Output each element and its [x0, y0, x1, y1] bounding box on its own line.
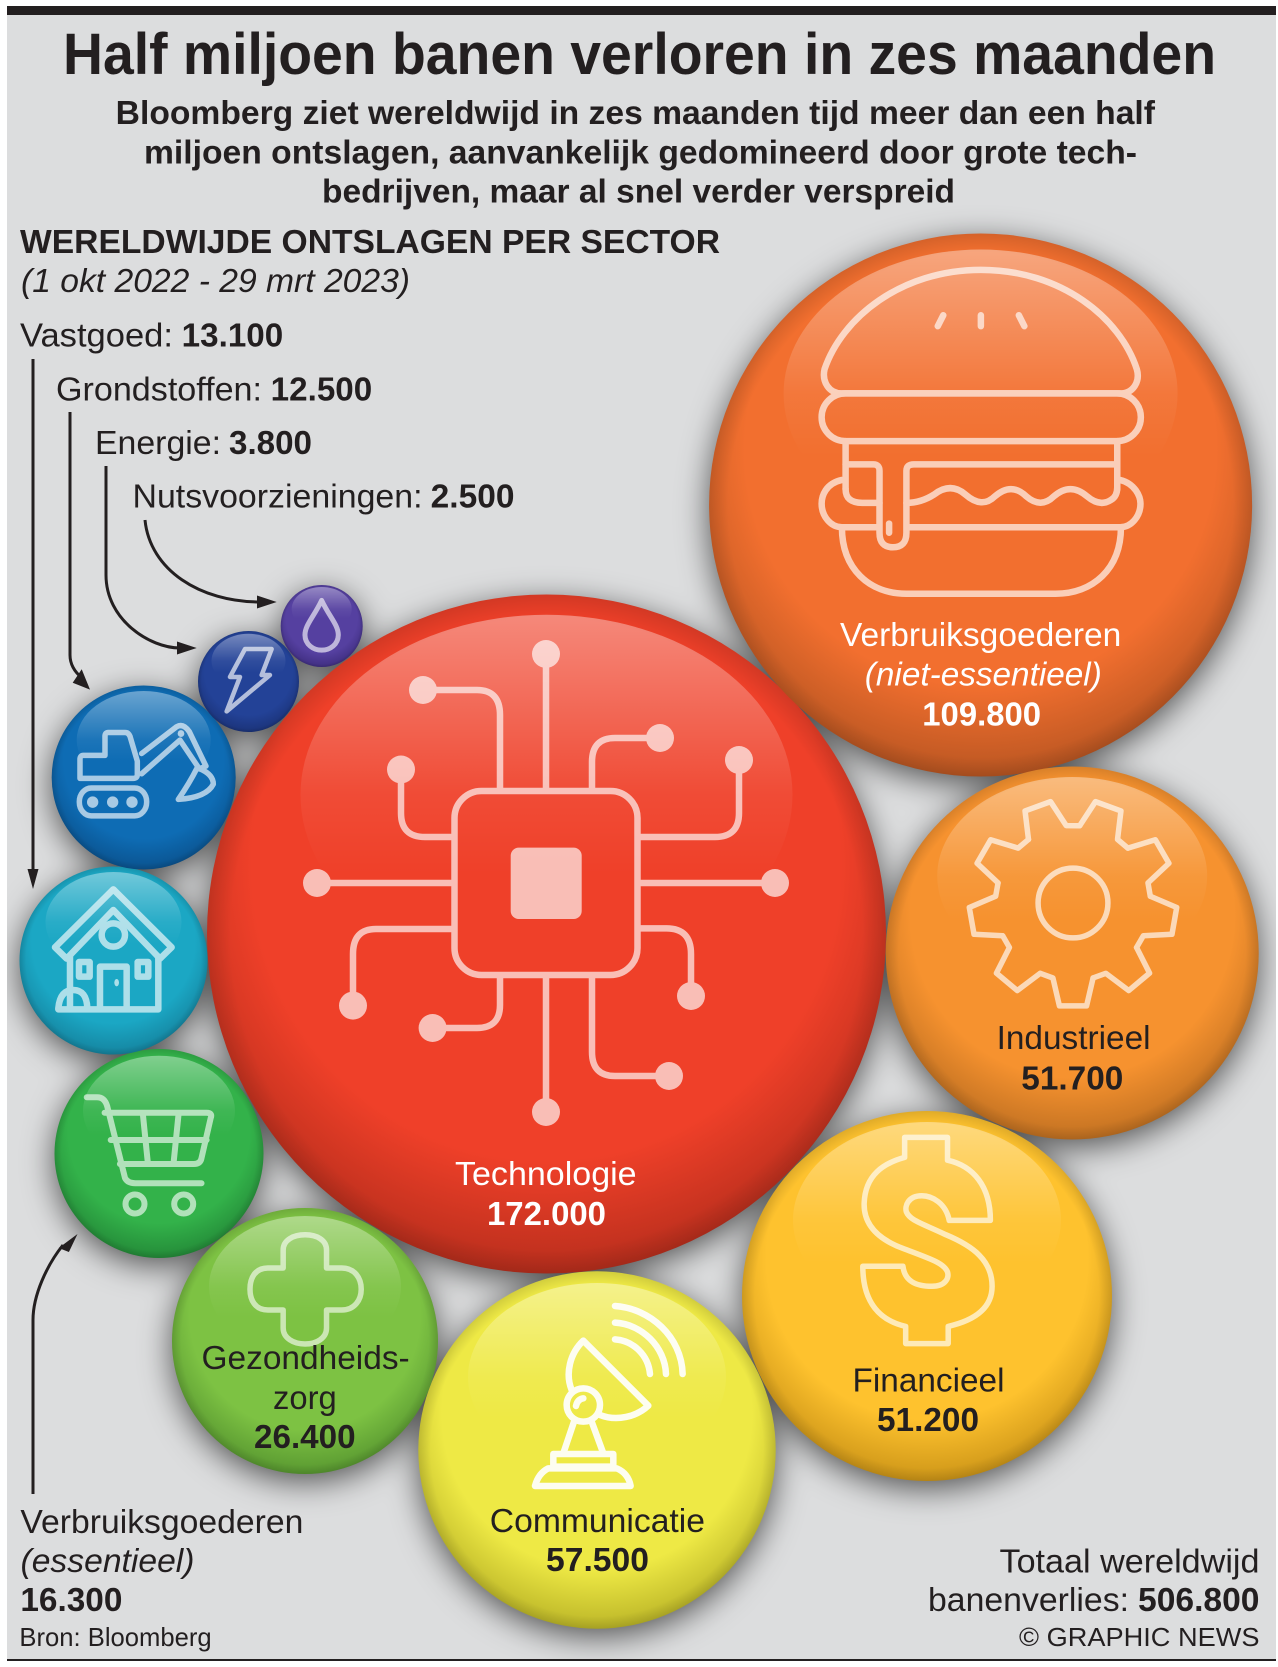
label: Nutsvoorzieningen: 2.500 [431, 477, 514, 514]
bubble: Financieel [742, 1111, 1112, 1481]
arrow: Nutsvoorzieningen [145, 520, 277, 608]
arrow: Verbruiksgoederen essentieel [33, 1234, 78, 1494]
label: Verbruiksgoederen [840, 616, 1121, 732]
icon: gear [966, 795, 1179, 1006]
section heading: WERELDWIJDE ONTSLAGEN PER SECTOR [20, 223, 720, 260]
label: Energie: Energie: [95, 424, 221, 461]
label: Industrieel: Industrieel [997, 1019, 1151, 1056]
label: Grondstoffen: 12.500 [271, 371, 372, 408]
bubble: Energie [198, 631, 299, 732]
label: Financieel: 51.200 [877, 1401, 979, 1438]
label: Gezondheidszorg [202, 1339, 410, 1455]
total callout: 506.800 [1138, 1581, 1260, 1618]
icon: lightning bolt [227, 649, 272, 711]
bubble: Verbruiksgoederen niet-essentieel [709, 234, 1252, 776]
icon: microchip [303, 640, 789, 1126]
label: Verbruiksgoederen essentieel: (essentieel) [20, 1542, 194, 1579]
total callout: Totaal wereldwijd [1000, 1543, 1260, 1580]
label: Nutsvoorzieningen: Nutsvoorzieningen: [132, 477, 422, 514]
label: Verbruiksgoederen essentieel: Verbruiksgoederen [20, 1503, 303, 1540]
bubble: Vastgoed [20, 866, 208, 1054]
arrow: Vastgoed [28, 359, 38, 889]
label: Energie [95, 424, 312, 461]
icon: house [55, 889, 172, 1009]
icon: medical cross [250, 1235, 361, 1344]
total callout: banenverlies: [928, 1581, 1129, 1618]
label: Verbruiksgoederen: 109.800 [922, 696, 1041, 732]
label: Gezondheidszorg: Gezondheids- [202, 1339, 410, 1376]
bubble: Communicatie [418, 1271, 776, 1629]
total callout [928, 1543, 1260, 1618]
label: Grondstoffen [56, 371, 372, 408]
bubble: Grondstoffen [52, 686, 236, 870]
label: Gezondheidszorg: zorg [273, 1379, 337, 1416]
label: Energie: 3.800 [229, 424, 312, 461]
date range: (1 okt 2022 - 29 mrt 2023) [21, 262, 410, 299]
bottom rule [7, 1659, 1276, 1661]
label: Technologie: Technologie [455, 1155, 637, 1192]
arrow: Grondstoffen [70, 412, 90, 690]
source: Bron: Bloomberg [19, 1622, 212, 1652]
label: Verbruiksgoederen: Verbruiksgoederen [840, 616, 1121, 653]
title: Half miljoen banen verloren in zes maanden [63, 22, 1216, 87]
label: Communicatie: Communicatie [490, 1502, 705, 1539]
subtitle [116, 94, 1156, 210]
credit: © GRAPHIC NEWS [1019, 1622, 1260, 1652]
label: Communicatie [490, 1502, 705, 1578]
bubble: Industrieel [886, 766, 1259, 1140]
label: Gezondheidszorg: 26.400 [254, 1418, 356, 1455]
icon: water drop [305, 600, 338, 650]
label: Industrieel: 51.700 [1021, 1060, 1123, 1097]
label: Verbruiksgoederen: (niet-essentieel) [865, 656, 1102, 692]
subtitle: Bloomberg ziet wereldwijd in zes maanden tijd meer dan een half [116, 94, 1156, 131]
icon: excavator [79, 726, 213, 816]
icon: shopping cart [87, 1097, 211, 1214]
label: Vastgoed: Vastgoed: [20, 317, 173, 354]
arrow: Energie [106, 466, 197, 654]
bubble: Nutsvoorzieningen [281, 585, 363, 667]
label: Vastgoed: 13.100 [182, 317, 283, 354]
label: Financieel [852, 1362, 1004, 1438]
subtitle: miljoen ontslagen, aanvankelijk gedomineerd door grote tech- [144, 134, 1137, 170]
label: Communicatie: 57.500 [546, 1541, 649, 1578]
bubble: Gezondheidszorg [172, 1208, 438, 1474]
top bar [7, 6, 1276, 15]
bubble: Verbruiksgoederen essentieel [54, 1049, 264, 1258]
icon: burger [822, 270, 1141, 594]
label: Grondstoffen: Grondstoffen: [56, 371, 262, 408]
label: Verbruiksgoederen essentieel: 16.300 [20, 1581, 122, 1618]
icon: dollar [863, 1137, 992, 1344]
label: Industrieel [997, 1019, 1151, 1097]
label: Technologie [455, 1155, 637, 1232]
label: Verbruiksgoederen essentieel [20, 1503, 303, 1618]
subtitle: bedrijven, maar al snel verder verspreid [322, 173, 955, 210]
label: Technologie: 172.000 [487, 1195, 606, 1232]
label: Vastgoed [20, 317, 283, 354]
bubble: Technologie [207, 594, 886, 1274]
label: Financieel: Financieel [852, 1362, 1004, 1399]
icon: satellite dish [535, 1306, 683, 1486]
